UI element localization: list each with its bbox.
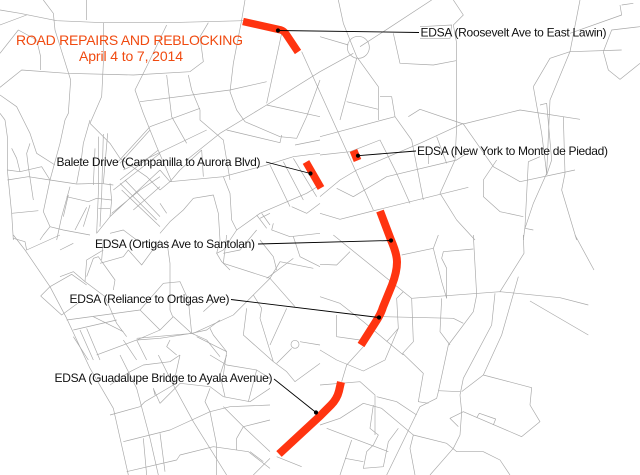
callout: EDSA New York to Monte de Piedad: EDSA (New York to Monte de Piedad) [417, 144, 608, 158]
callout: Balete Drive [56, 155, 313, 176]
repaired segment: Balete Drive [306, 162, 321, 188]
title [16, 32, 243, 64]
callout: EDSA Ortigas Ave to Santolan: EDSA (Ortigas Ave to Santolan) [95, 237, 255, 251]
callout: EDSA Guadalupe Bridge to Ayala Avenue [54, 371, 318, 415]
repaired segment: EDSA Guadalupe Bridge to Ayala Avenue [279, 382, 341, 454]
title: ROAD REPAIRS AND REBLOCKING [16, 32, 243, 48]
callout: Balete Drive: Balete Drive (Campanilla to Aurora Blvd) [56, 155, 260, 169]
title: April 4 to 7, 2014 [79, 48, 183, 64]
repaired segment: EDSA New York to Monte de Piedad [354, 150, 358, 160]
repaired segment: EDSA Roosevelt Ave to East Lawin [243, 22, 298, 52]
callout: EDSA Reliance to Ortigas Ave [70, 292, 381, 320]
callout: EDSA Reliance to Ortigas Ave: EDSA (Reliance to Ortigas Ave) [70, 292, 230, 306]
callout: EDSA Roosevelt Ave to East Lawin: EDSA (Roosevelt Ave to East Lawin) [420, 26, 606, 40]
callout: EDSA Ortigas Ave to Santolan [95, 237, 393, 251]
callout: EDSA Guadalupe Bridge to Ayala Avenue: EDSA (Guadalupe Bridge to Ayala Avenue) [54, 371, 272, 385]
repaired segment: EDSA Ortigas Ave to Santolan and Reliance to Ortigas Ave [361, 211, 397, 345]
callout: EDSA Roosevelt Ave to East Lawin [276, 26, 606, 40]
